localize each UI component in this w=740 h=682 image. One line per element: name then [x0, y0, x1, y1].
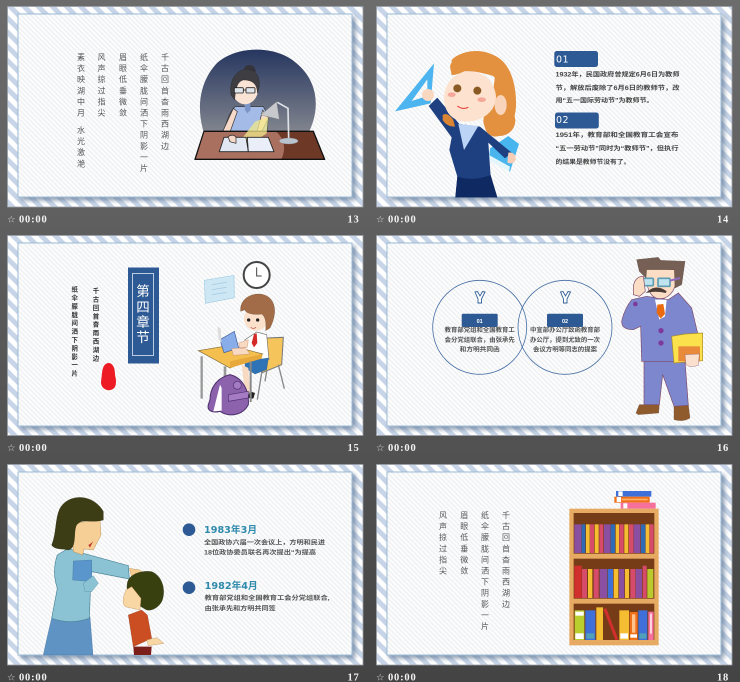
footer 15: 00:00	[19, 443, 48, 454]
circle 02: 中宣部办公厅致函教育部	[530, 326, 600, 334]
footer 15	[7, 443, 360, 454]
poem text: 千古回首杳雨西湖边	[502, 510, 510, 611]
footer 15: ☆	[7, 443, 16, 454]
circle 02: 办公厅，提到尤致的一次	[530, 336, 601, 344]
footer 13: ☆	[7, 214, 16, 226]
timeline dot 1	[183, 523, 195, 536]
text block 01	[556, 70, 680, 104]
icon: trophy fork 01	[475, 292, 485, 303]
illustration: woman with set square	[395, 51, 519, 197]
entry 1982: 由张承先和方明共同签	[205, 604, 276, 612]
footer 14: 14	[717, 214, 729, 226]
label badge 01: 01	[556, 54, 569, 66]
chapter title: 节	[136, 330, 150, 345]
poem text: 风声掠过指尖	[97, 53, 106, 120]
poem text: 千古回首杳雨西湖边	[160, 52, 170, 153]
circle 02	[518, 280, 612, 374]
circle 01	[433, 280, 527, 374]
poem text: 眉眼低垂微敛	[118, 53, 128, 120]
icon: trophy fork 02	[560, 292, 570, 303]
circle 01: 教育部党组和全国教育工	[445, 326, 515, 334]
footer 13: 13	[348, 214, 360, 226]
entry 1982	[205, 580, 330, 612]
footer 14	[376, 214, 729, 226]
footer 16: 16	[717, 443, 729, 454]
red seal	[101, 363, 116, 390]
illustration: man with glasses and books	[622, 257, 703, 421]
circle 02: 02	[562, 319, 568, 325]
poem text: 风声掠过指尖	[438, 511, 448, 578]
illustration: bookshelf	[569, 491, 659, 645]
slide 17	[7, 464, 363, 682]
text block 02: “五一劳动节”同时为“教师节”，但执行	[556, 144, 678, 152]
entry 1982: 教育部党组和全国教育工会分党组联合,	[205, 594, 330, 602]
chapter title: 四	[136, 300, 150, 315]
slide 16	[376, 236, 732, 454]
chapter title: 章	[136, 314, 150, 330]
entry 1983: 全国政协六届一次会议上，方明和民进	[204, 538, 326, 546]
text block 01: 用“五一国际劳动节”为教师节。	[556, 96, 654, 104]
poem text	[438, 510, 510, 633]
footer 18	[376, 672, 729, 682]
entry 1983	[204, 524, 326, 557]
illustration: mother and child	[43, 497, 164, 655]
text block 01: 1932年，民国政府曾规定6月6日为教师	[556, 70, 680, 78]
label badge 02: 02	[556, 115, 569, 126]
slide 14	[376, 6, 732, 226]
vertical text: 纸伞朦胧间洒下阴影一片	[70, 285, 77, 378]
circle 01: 和方明共同函	[460, 346, 500, 354]
illustration: boy reading at desk	[198, 262, 284, 415]
entry 1983: 1983年3月	[204, 524, 257, 536]
vertical text	[70, 285, 99, 378]
chapter title	[128, 268, 159, 364]
circle 01: 会分党组联合，由张承先	[445, 336, 515, 344]
text block 02: 1951年，教育部和全国教育工会宣布	[556, 131, 678, 139]
label badge 01	[554, 51, 598, 67]
slide 18	[376, 464, 732, 682]
vertical text: 千古回首杳雨西湖边	[92, 286, 99, 363]
slide 15	[7, 236, 363, 454]
footer 16	[376, 443, 729, 454]
footer 14: 00:00	[388, 214, 416, 226]
poem text: 水光激滟	[76, 125, 86, 170]
text block 01: 节，解放后废除了6月6日的教师节，改	[556, 84, 680, 92]
poem text: 眉眼低垂微敛	[460, 511, 469, 578]
footer 16: ☆	[376, 443, 385, 454]
slide 13	[7, 6, 363, 226]
entry 1983: 18位政协委员联名再次提出“为提高	[204, 549, 316, 557]
entry 1982: 1982年4月	[205, 580, 258, 592]
label badge 02	[555, 112, 599, 128]
footer 17	[7, 672, 360, 682]
poem text: 纸伞朦胧间洒下阴影一片	[140, 52, 148, 175]
text block 02: 的结果是教师节没有了。	[556, 158, 630, 166]
footer 13: 00:00	[19, 214, 48, 226]
footer 16: 00:00	[388, 443, 416, 454]
footer 15: 15	[348, 443, 360, 454]
circle 01: 01	[477, 319, 483, 325]
poem text: 纸伞朦胧间洒下阴影一片	[480, 510, 490, 633]
timeline dot 2	[183, 581, 195, 594]
footer 13	[7, 214, 360, 226]
circle 02: 会议方明等同志的提案	[533, 346, 598, 354]
poem text	[76, 52, 170, 175]
footer 14: ☆	[376, 214, 385, 226]
illustration: girl at desk with lamp	[195, 50, 325, 159]
text block 02	[556, 131, 678, 166]
poem text: 素衣映湖中月	[76, 52, 86, 120]
chapter title: 第	[136, 283, 150, 299]
